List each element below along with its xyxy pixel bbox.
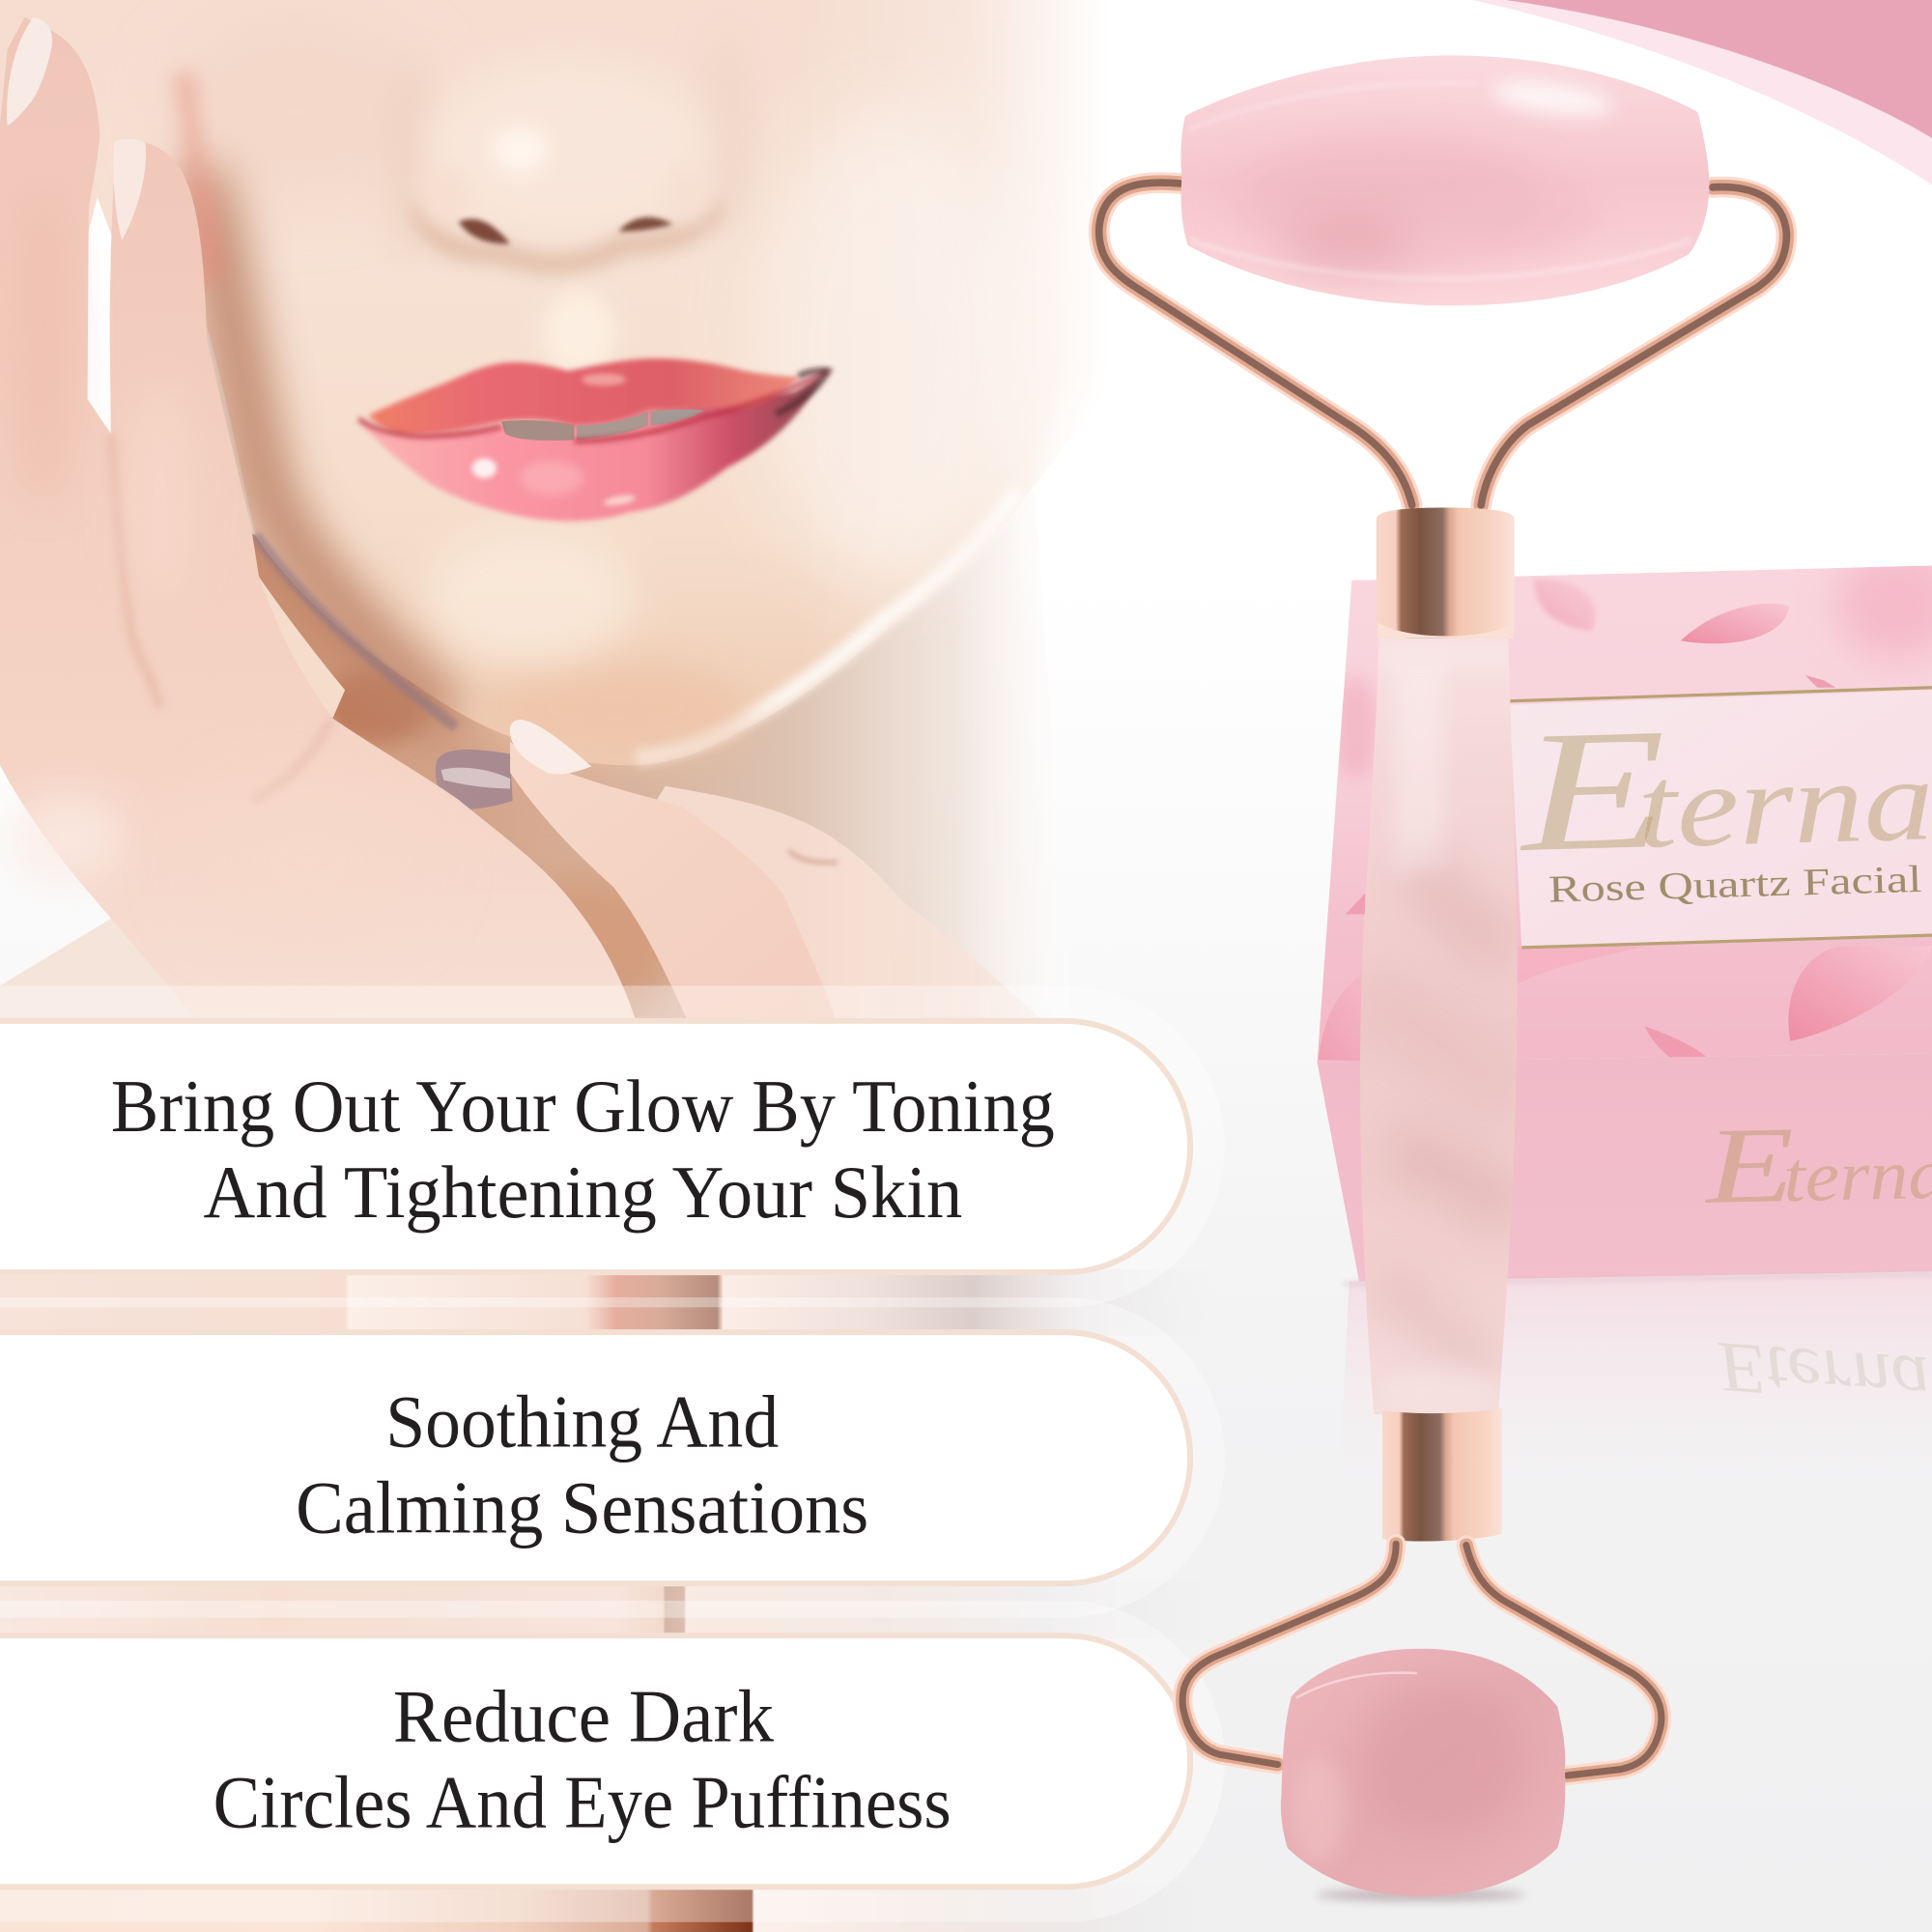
box reflection on table	[1337, 1271, 1932, 1528]
mouth line	[358, 371, 828, 441]
chin tan	[480, 659, 752, 757]
product box	[1318, 549, 1932, 1282]
front brand text: E	[1702, 1105, 1796, 1227]
box reflection on table: Eternal	[1714, 1326, 1932, 1422]
quartz handle	[1355, 635, 1521, 1417]
left hand	[0, 17, 636, 1020]
benefit pill 2	[0, 1332, 1190, 1583]
roller floor shadow	[1316, 1889, 1525, 1901]
fingernail B	[113, 139, 146, 241]
right edge soft fade	[1047, 382, 1182, 653]
thumb / index pinching chin	[510, 742, 836, 1020]
top collar	[1377, 508, 1515, 639]
left face shadow	[203, 160, 443, 721]
small roller head	[1275, 1645, 1571, 1901]
shoulder	[0, 914, 210, 1020]
chin fingernail	[510, 720, 591, 775]
benefit pill 3	[0, 1635, 1190, 1887]
box top petals	[1319, 549, 1932, 1064]
upper cheek tint	[180, 81, 317, 211]
benefit text 2: Calming Sensations	[296, 1466, 868, 1549]
pill halos	[0, 985, 1225, 1922]
label brand text: Rose Quartz Facial	[1548, 858, 1922, 911]
pale wrist wedge	[256, 573, 345, 719]
benefit pill 1	[0, 1021, 1190, 1272]
knuckle creases	[746, 850, 838, 943]
far thumb nail behind finger	[436, 750, 513, 810]
benefit text 2: Soothing And	[385, 1379, 779, 1463]
nose	[392, 79, 739, 369]
box front face	[1318, 1054, 1932, 1282]
top wire frame	[1099, 183, 1786, 505]
corner decoration: pink swoosh	[1472, 0, 1932, 185]
lip glints	[472, 458, 497, 478]
rose quartz roller	[1099, 49, 1786, 1901]
fingernail A	[7, 17, 52, 126]
benefit text 1: Bring Out Your Glow By Toning	[111, 1065, 1055, 1148]
jaw purple shadow	[255, 535, 456, 727]
face shape	[0, 0, 1115, 765]
right cheek glow	[752, 111, 1023, 579]
bottom collar	[1382, 1408, 1502, 1542]
lower face highlight	[425, 529, 635, 666]
finger crease shadows	[111, 434, 160, 708]
photo: woman's face and hands	[0, 0, 1182, 1023]
jaw rim light	[636, 491, 1018, 756]
label brand text: E	[1515, 693, 1669, 888]
bottom wire frame	[1182, 1544, 1662, 1776]
teeth	[501, 420, 574, 440]
neck	[246, 469, 1072, 1023]
back fingers	[640, 786, 1042, 1020]
lips	[358, 358, 828, 521]
box shadow	[1343, 1274, 1932, 1284]
label brand text	[1520, 733, 1928, 904]
box top face	[1318, 565, 1932, 1062]
label brand text: ternal	[1635, 734, 1932, 873]
big roller head	[1171, 49, 1719, 314]
photo strips between pills	[0, 1269, 1233, 1932]
label panel	[1509, 688, 1932, 949]
benefit text 3: Reduce Dark	[393, 1674, 774, 1757]
benefit text 3: Circles And Eye Puffiness	[213, 1761, 952, 1844]
benefit text 1: And Tightening Your Skin	[203, 1151, 962, 1234]
